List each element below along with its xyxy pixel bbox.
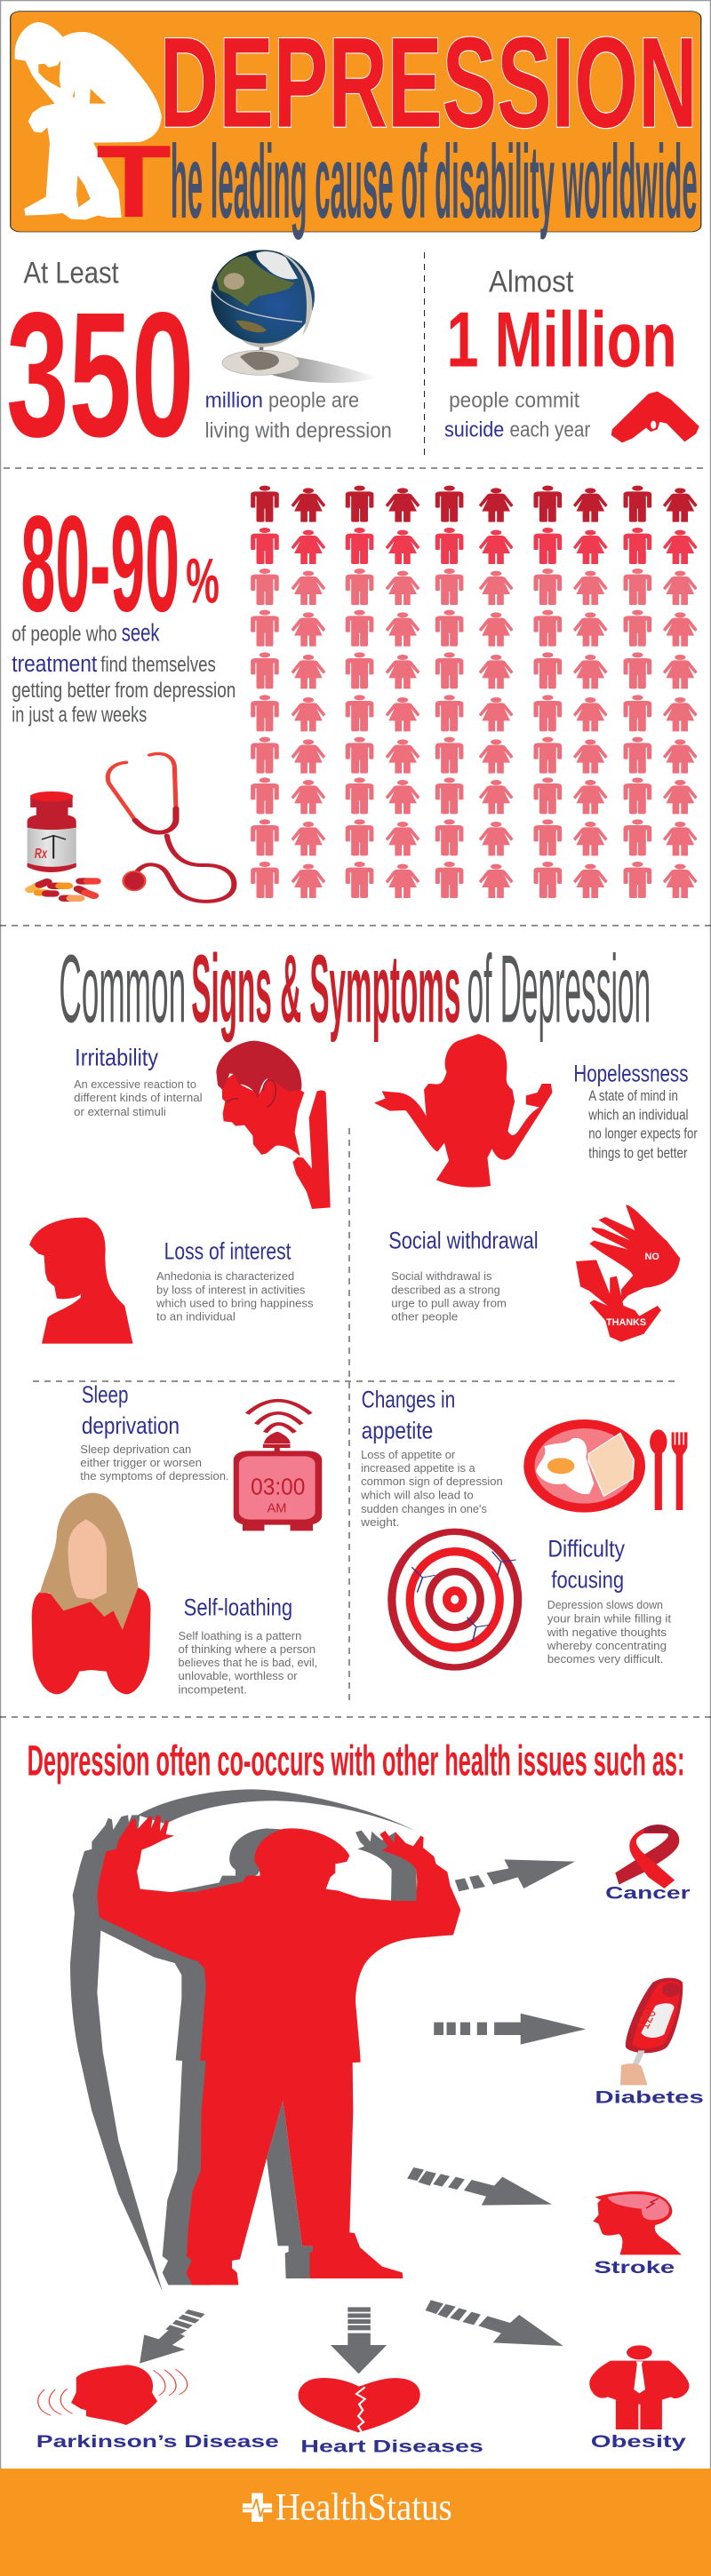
pictogram row 4 [251,610,698,647]
panel: treatment stat: 80-90 [20,488,180,640]
divider [4,467,704,469]
panel: co-occurring health issues [28,1737,704,2456]
symptom: Difficulty focusing [547,1536,671,1666]
symptom: Social withdrawal: urge to pull away from [391,1297,507,1310]
text: people commit suicide each year: suicide [444,417,504,441]
symptom: Changes in appetite [360,1387,503,1529]
icon: no thanks hands [576,1205,680,1342]
figure: red man [97,1815,460,2285]
panel: 350 million stat: 350 [6,275,194,473]
symptom: Irritability: different kinds of internal [74,1091,203,1104]
symptom: Social withdrawal: Social withdrawal [388,1228,539,1254]
symptom: Sleep deprivation: the symptoms of depression. [80,1469,229,1483]
panel: treatment stat: % [186,545,220,616]
icon: alarm clock: 03:00 [251,1475,305,1500]
symptom: Irritability [74,1045,203,1118]
symptom: Loss of interest: Anhedonia is characterized [156,1269,294,1283]
figure: man with raised arms and shadow [70,1789,460,2291]
divider [0,925,711,926]
symptom: Self-loathing: believes that he is bad, evil, [179,1656,317,1669]
icon: glucose meter [620,1978,683,2085]
symptom: Sleep deprivation: Sleep [82,1382,128,1408]
icon: shaking head [38,2365,188,2425]
symptom: Difficulty focusing: focusing [551,1567,624,1594]
label: Parkinson's Disease: Parkinson’s Disease [36,2432,279,2452]
icon: plate with egg and toast [523,1419,687,1513]
text: treatment description: treatment [12,652,98,677]
symptom: Self-loathing: incompetent. [179,1683,247,1697]
arrow to heart disease [331,2307,387,2373]
label: Heart Diseases: Heart Diseases [300,2437,483,2456]
symptom: Social withdrawal [388,1228,539,1324]
text: million people are living with depression [205,388,392,442]
label: Obesity: Obesity [591,2432,686,2452]
text: treatment description: in just a few weeks [12,703,147,727]
pictogram row 5 [251,652,698,688]
pictogram row 9 [251,819,698,855]
symptom: Loss of interest [156,1238,314,1324]
symptom: Self-loathing [179,1594,317,1697]
logo: HealthStatus [243,2486,452,2529]
symptom: Self-loathing: of thinking where a person [179,1642,316,1656]
text: people commit suicide each year [444,388,590,441]
symptom: Irritability: or external stimuli [74,1105,166,1118]
icon: handgun [611,392,699,442]
symptom: Changes in appetite: Changes in [362,1387,455,1413]
symptom: Sleep deprivation: deprivation [82,1413,180,1439]
symptom: Loss of interest: to an individual [156,1310,236,1324]
panel: 1 million stat [444,264,699,442]
text: people commit suicide each year: each year [509,417,590,441]
icon: woman covering face [32,1493,150,1694]
icon: no thanks hands: NO [645,1252,659,1262]
text: treatment description [12,618,236,727]
arrow to parkinsons [140,2310,205,2364]
pictogram row 7 [251,737,698,774]
symptom: Irritability: Irritability [75,1045,159,1071]
icon: stroke head [593,2191,682,2254]
symptom: Changes in appetite: weight. [360,1515,399,1529]
symptom: Changes in appetite: sudden changes in one's [361,1502,487,1515]
text: million people are living with depression: people are [268,388,359,412]
icon: target with darts [387,1529,522,1671]
panel: header banner [11,11,701,240]
label: Cancer: Cancer [605,1883,691,1903]
icon: medicine bottle [28,791,76,872]
heading: Common Signs & Symptoms of Depression: Common [59,934,186,1043]
text: treatment description: of people who [12,622,117,646]
icon: cancer ribbon [615,1825,679,1888]
symptom: Sleep deprivation [80,1382,229,1483]
symptom: Social withdrawal: Social withdrawal is [391,1269,492,1283]
arrow to cancer [455,1859,575,1891]
symptom: Social withdrawal: other people [391,1310,458,1324]
banner background [11,12,701,232]
text: treatment description: getting better from depression [12,678,236,702]
divider [423,252,425,457]
panel: treatment stat [12,486,698,902]
number: 80-90% [20,488,220,640]
footer band [0,2469,711,2576]
symptom: Changes in appetite: which will also lead to [360,1489,474,1502]
pictogram row 10 [251,862,698,898]
symptom: Self-loathing: Self-loathing [184,1594,292,1621]
dividers [33,1128,675,1702]
symptom: Changes in appetite: common sign of depression [361,1475,503,1488]
symptom: Sleep deprivation: either trigger or worsen [80,1456,202,1469]
symptom: Changes in appetite: appetite [362,1418,433,1444]
symptom: Social withdrawal: described as a strong [391,1284,500,1297]
symptom: Self-loathing: unlovable, worthless or [179,1669,298,1682]
text: treatment description: find themselves [100,652,216,676]
icon: no thanks hands: THANKS [606,1317,646,1328]
icon: glucose meter: 120 [632,2008,660,2031]
arrow to diabetes [434,2014,586,2045]
label: Almost: Almost [489,264,574,298]
icon: alarm clock: AM [268,1501,286,1516]
icon: obese man [589,2345,690,2429]
label: Stroke: Stroke [594,2258,675,2278]
symptom: Loss of interest: Loss of interest [164,1238,292,1265]
panel: signs and symptoms upper [29,934,698,1344]
text: million people are living with depression: living with depression [205,418,392,442]
icon: seated depressed figure [15,22,162,219]
chart: pictogram rows of people [251,486,698,898]
label: At Least: At Least [24,255,119,290]
icon: shrugging woman [374,1034,552,1188]
symptom: Sleep deprivation: Sleep deprivation can [80,1443,191,1456]
text: treatment description: seek [122,618,160,647]
symptom: Changes in appetite: increased appetite is a [361,1461,475,1475]
divider [0,1716,711,1718]
label: Diabetes: Diabetes [595,2087,704,2107]
symptom: Loss of interest: which used to bring happiness [156,1297,314,1310]
icon: man looking down [29,1218,132,1344]
text: million people are living with depression: million [205,388,263,412]
symptom: Self-loathing: Self loathing is a pattern [179,1629,301,1642]
icon: medicine bottle: Rx [35,846,48,862]
logo: HealthStatus: HealthStatus [276,2486,452,2529]
icon: globe on stand [211,250,378,383]
symptom: Changes in appetite: Loss of appetite or [361,1448,456,1461]
pictogram row 2 [251,528,698,564]
symptom: Irritability: An excessive reaction to [74,1077,196,1091]
text: people commit suicide each year: people commit [449,388,579,412]
symptom: Hopelessness [573,1061,698,1161]
icon: shouting man [216,1041,331,1209]
subtitle: The leading cause of disability worldwide: T [96,123,172,239]
icon: pills [30,881,96,898]
pictogram row 1 [251,486,698,522]
icon: alarm clock [234,1401,322,1530]
pictogram row 6 [251,695,698,731]
panel: signs and symptoms lower [32,1382,687,1697]
symptom: Loss of interest: by loss of interest in activities [156,1284,305,1297]
pictogram row 3 [251,568,698,605]
figure: grey shadow [70,1789,417,2291]
icon: broken heart [299,2378,420,2432]
symptom: Difficulty focusing: Difficulty [547,1536,626,1562]
arrow to stroke [407,2167,552,2206]
pictogram row 8 [251,777,698,814]
arrow to obesity [426,2300,563,2346]
icon: stethoscope [108,754,234,902]
